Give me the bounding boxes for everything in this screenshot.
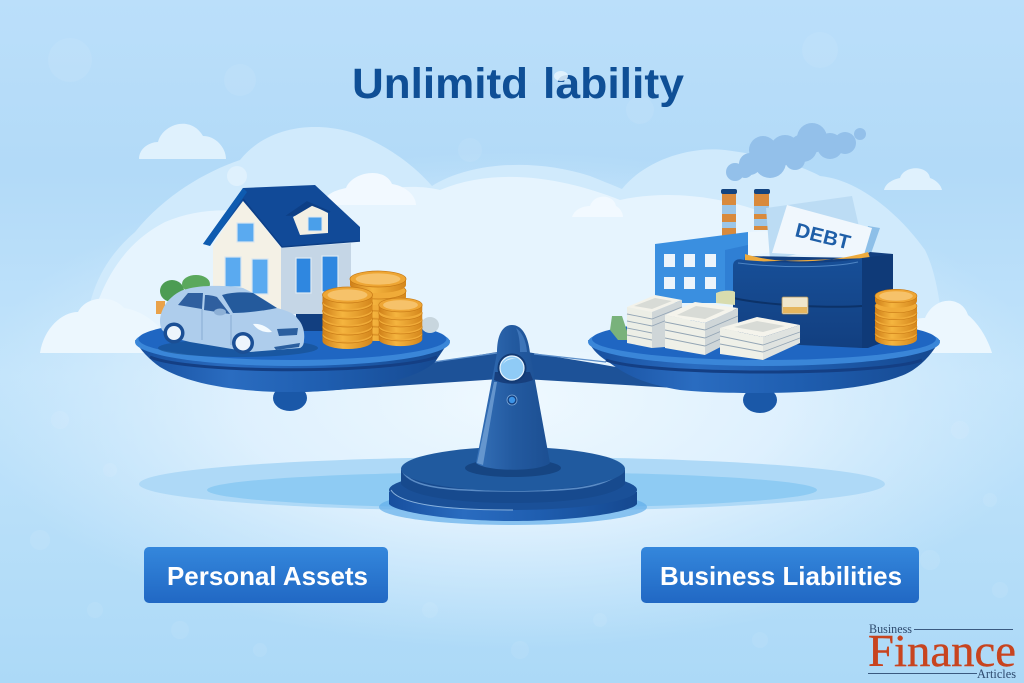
- icon: paper stacks: [610, 291, 800, 360]
- beam: [290, 352, 760, 393]
- ground shadow ellipses: [139, 457, 885, 511]
- icon: coin stacks: [322, 271, 439, 349]
- logo: business finance articles: Finance: [868, 625, 1016, 676]
- icon: smoke: [726, 123, 866, 181]
- panel: personal assets pan: [135, 185, 450, 411]
- bush: [156, 275, 210, 314]
- title: lability: [543, 60, 684, 108]
- label: business liabilities: Business Liabilities: [660, 561, 902, 591]
- logo: business finance articles: Articles: [977, 666, 1016, 681]
- icon: factory: [655, 189, 772, 303]
- pan left: [135, 318, 450, 411]
- icon: debt papers: DEBT: [793, 220, 853, 254]
- label: business liabilities: [641, 547, 919, 603]
- title: Unlimitd: [352, 60, 528, 108]
- panel: business liabilities pan: [588, 123, 940, 413]
- icon: briefcase: [733, 252, 893, 348]
- clouds backdrop: [40, 124, 992, 353]
- post: [476, 325, 550, 470]
- label: personal assets: Personal Assets: [167, 561, 368, 591]
- icon: car: [160, 286, 304, 354]
- icon: coins right: [875, 289, 917, 346]
- label: personal assets: [144, 547, 388, 603]
- logo: business finance articles: Business: [869, 621, 912, 636]
- pan right: [588, 318, 940, 413]
- base: [379, 447, 647, 525]
- icon: house: [203, 185, 360, 331]
- icon: debt papers: [766, 196, 880, 262]
- scale: [290, 325, 760, 525]
- title: [352, 60, 684, 108]
